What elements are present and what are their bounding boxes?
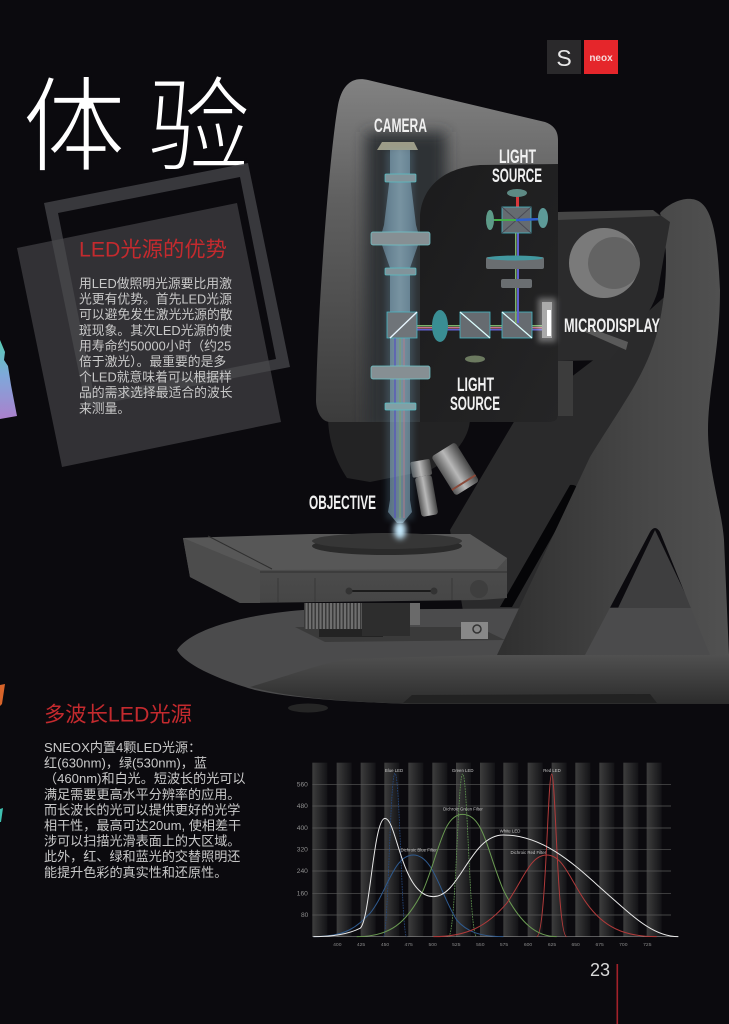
x axis labels: 575 (500, 942, 508, 948)
y axis labels: 400 (297, 825, 308, 832)
x axis labels (333, 942, 652, 948)
text block: SNEOX light sources: 红(630nm)，绿(530nm)，蓝 (44, 756, 207, 771)
splitter 3 (502, 312, 532, 338)
panel body text: 用LED做照明光源要比用激 (79, 276, 232, 291)
side box (558, 210, 670, 416)
inner triangle (618, 530, 692, 608)
y axis labels: 80 (301, 912, 309, 919)
panel body text: 倍于激光）。最重要的是多 (79, 354, 226, 369)
text block: SNEOX light sources: SNEOX内置4颗LED光源： (44, 740, 201, 755)
x axis labels: 650 (571, 942, 580, 948)
focus drums (304, 603, 420, 637)
text block: SNEOX light sources: 相干性，最高可达20um, 使相差干 (44, 817, 241, 833)
objective lens large (431, 442, 479, 496)
dichroic cube (502, 207, 531, 233)
label: light source top (492, 147, 542, 187)
text block: SNEOX light sources: 能提升色彩的真实性和还原性。 (44, 864, 227, 880)
spectrum chart (297, 763, 678, 948)
stage knob (470, 580, 488, 598)
slot in back leg (500, 485, 577, 607)
panel body text (79, 276, 233, 416)
label: microdisplay: MICRODISPLAY (564, 316, 660, 337)
panel body text: 品的需求选择最适合的波长 (79, 385, 233, 400)
left edge colour fragment: orange (0, 684, 5, 706)
text block: SNEOX light sources (44, 740, 246, 880)
x axis labels: 625 (548, 942, 556, 948)
panel body text: 光更有优势。首先LED光源 (79, 292, 232, 307)
microdisplay (538, 298, 556, 342)
panel body text: 斑现象。其次LED光源的使 (79, 323, 232, 338)
logo: neox (589, 53, 613, 64)
text block: SNEOX light sources: 涉可以扫描光滑表面上的大区域。 (44, 834, 240, 849)
label: light source lower: SOURCE (450, 394, 500, 415)
text block: SNEOX light sources: （460nm)和白光。短波长的光可以 (44, 771, 246, 786)
text block: SNEOX light sources: 此外，红、绿和蓝光的交替照明还 (44, 848, 240, 864)
dark window (420, 164, 558, 422)
x axis labels: 525 (452, 942, 461, 948)
label: light source lower (450, 375, 500, 415)
label: light source top: SOURCE (492, 166, 542, 187)
back leg (450, 290, 672, 655)
green LED (486, 210, 494, 230)
translucent card (17, 203, 281, 467)
splitter 1 (387, 312, 417, 338)
logo: S (556, 45, 572, 71)
curve labels: Blue LED (385, 768, 403, 773)
panel body text: 来测量。 (79, 401, 130, 416)
x axis labels: 475 (405, 942, 413, 948)
x axis labels: 550 (476, 942, 485, 948)
curve labels: Green LED (452, 768, 473, 773)
x axis labels: 425 (357, 942, 365, 948)
curve labels: Dichroic Blue Filter (401, 848, 437, 853)
text block: SNEOX light sources: 而长波长的光可以提供更好的光学 (44, 802, 240, 817)
panel body text: 可以避免发生激光光源的散 (79, 307, 233, 322)
relay lens (432, 310, 448, 342)
panel body text: 个LED就意味着可以根据样 (79, 370, 232, 385)
small block (461, 622, 488, 639)
curve labels (385, 768, 561, 855)
curve labels: Dichroic Red Filter (511, 850, 547, 855)
lever (583, 328, 628, 350)
y axis labels: 480 (297, 803, 308, 810)
panel body text: 用寿命约50000小时（约25 (79, 338, 231, 353)
curve: blue LED (383, 773, 407, 937)
glow (386, 150, 414, 520)
y axis labels (297, 781, 309, 919)
left edge colour fragment: teal (0, 808, 3, 822)
splitter 2 (460, 312, 490, 338)
x axis labels: 400 (333, 942, 342, 948)
knob (569, 228, 639, 298)
red LED (507, 189, 527, 197)
y axis labels: 160 (297, 890, 308, 897)
rainbow rays (394, 338, 396, 518)
heading: multi-wavelength LED: 多波长LED光源 (44, 702, 192, 726)
y axis labels: 560 (297, 781, 308, 788)
base (177, 607, 729, 712)
curve: white LED (313, 818, 678, 937)
page marker line (616, 964, 618, 1024)
x axis labels: 600 (524, 942, 532, 948)
panel: LED advantages (17, 163, 290, 467)
x axis labels: 725 (643, 942, 652, 948)
lens A (486, 257, 544, 269)
curve labels: Red LED (543, 768, 561, 773)
head shell (316, 79, 558, 422)
label: light source lower: LIGHT (457, 375, 494, 396)
title: 体验 (22, 70, 272, 186)
panel heading: LED光源的优势 (79, 238, 227, 262)
curve: dichroic red (433, 855, 657, 937)
label: light source top: LIGHT (499, 147, 536, 168)
x axis labels: 700 (619, 942, 628, 948)
lens B (501, 279, 532, 288)
label: objective: OBJECTIVE (309, 493, 376, 514)
curve: red LED (537, 774, 567, 937)
vertical light path (465, 189, 548, 362)
tip glow (394, 521, 406, 539)
x axis labels: 675 (595, 942, 604, 948)
horizontal light path (387, 310, 545, 342)
stage (183, 533, 507, 603)
x axis labels: 500 (429, 942, 437, 948)
rotated frame (44, 163, 290, 407)
curve: green LED (448, 774, 477, 937)
lenses (385, 174, 416, 182)
shell shadow behind optics (366, 132, 446, 432)
stage disc (312, 537, 462, 555)
curve: dichroic blue (313, 855, 503, 937)
objective lens small (410, 459, 439, 517)
left edge colour fragment: upper (0, 340, 17, 419)
stage rail (352, 590, 434, 592)
small lens (465, 356, 485, 362)
curve labels: Dichroic Green Filter (443, 807, 483, 812)
y axis labels: 240 (297, 868, 308, 875)
logo (547, 40, 618, 74)
blue LED (538, 208, 548, 228)
y axis labels: 320 (297, 846, 308, 853)
page number: 23 (590, 960, 610, 980)
x axis labels: 450 (381, 942, 389, 948)
front arch (497, 199, 729, 655)
nose housing (328, 415, 470, 482)
label: camera: CAMERA (374, 116, 427, 137)
microscope illustration (177, 79, 729, 712)
text block: SNEOX light sources: 满足需要更高水平分辨率的应用。 (44, 786, 240, 802)
curve: dichroic green (357, 814, 557, 937)
optics column (371, 142, 430, 539)
curve labels: White LED (500, 828, 520, 833)
